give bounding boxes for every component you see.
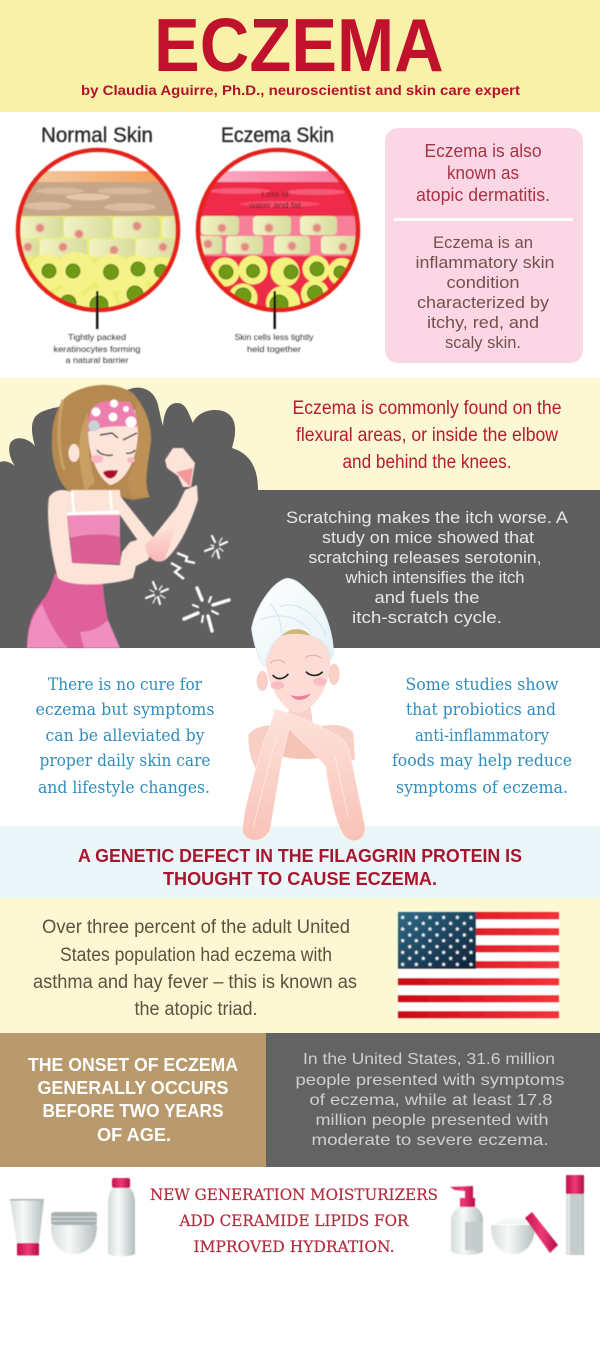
panel: normal skin diagram: a natural barrier	[66, 355, 129, 365]
text: definition: characterized by	[417, 293, 550, 312]
text: definition: inflammatory skin	[416, 253, 554, 272]
panel: atopic triad: asthma and hay fever – this is known as	[33, 972, 357, 993]
panel: atopic triad: the atopic triad.	[134, 999, 258, 1020]
panel: eczema skin diagram	[195, 124, 361, 354]
icon: spark large	[184, 588, 229, 631]
text: definition: itchy, red, and	[427, 313, 539, 332]
panel: atopic dermatitis callout: atopic dermatitis.	[416, 185, 550, 205]
panel: normal skin diagram: Tightly packed	[68, 332, 126, 342]
text: no cure	[36, 675, 214, 798]
text: no cure: can be alleviated by	[46, 726, 205, 746]
panel: atopic dermatitis callout: known as	[447, 163, 519, 183]
panel: atopic dermatitis callout	[385, 128, 583, 363]
panel: US prevalence: people presented with symptoms	[296, 1072, 564, 1089]
panel: onset of eczema: OF AGE.	[97, 1125, 171, 1145]
text: no cure: proper daily skin care	[40, 751, 210, 771]
panel: atopic dermatitis callout: Eczema is also	[424, 141, 542, 161]
text: scratching: Scratching makes the itch worse. A	[286, 509, 568, 527]
text: moisturizers: ADD CERAMIDE LIPIDS FOR	[179, 1211, 409, 1230]
panel: US prevalence: moderate to severe eczema.	[312, 1132, 548, 1149]
text: probiotics: foods may help reduce	[392, 751, 572, 771]
panel: US prevalence	[266, 1033, 600, 1167]
icon: zigzag	[171, 553, 195, 579]
panel: normal skin diagram	[15, 124, 181, 365]
panel: atopic triad: States population had eczema with	[60, 945, 332, 966]
illustration: products right	[450, 1175, 584, 1255]
panel: US prevalence: In the United States, 31.6 million	[303, 1051, 555, 1068]
header band	[0, 0, 600, 112]
text: scratching: and fuels the	[374, 589, 480, 607]
panel: US prevalence: of eczema, while at least 17.8	[310, 1092, 553, 1109]
text: flexural areas: flexural areas, or inside the elbow	[296, 425, 558, 446]
text: definition	[416, 233, 554, 352]
icon: spark	[205, 536, 227, 558]
panel: filaggrin statement: A GENETIC DEFECT IN THE FILAGGRIN PROTEIN IS	[78, 846, 522, 866]
illustration: products left	[10, 1178, 135, 1256]
panel: eczema skin diagram: Loss of	[262, 190, 289, 199]
text: definition: scaly skin.	[445, 333, 521, 352]
text: definition: Eczema is an	[433, 233, 533, 252]
text: probiotics: anti-inflammatory	[415, 726, 549, 746]
text: no cure: eczema but symptoms	[36, 700, 214, 720]
panel: normal skin diagram: Normal Skin	[41, 124, 153, 147]
panel: US prevalence: million people presented with	[316, 1112, 548, 1129]
panel: eczema skin diagram: Skin cells less tightly	[234, 332, 314, 342]
panel: onset of eczema: THE ONSET OF ECZEMA	[28, 1055, 238, 1075]
panel: onset of eczema	[0, 1033, 266, 1167]
panel: atopic triad	[0, 898, 600, 1033]
panel: atopic triad: Over three percent of the adult United	[42, 917, 350, 938]
text: definition: condition	[446, 273, 520, 292]
text: probiotics: symptoms of eczema.	[396, 778, 568, 798]
panel: normal skin diagram: keratinocytes forming	[54, 344, 141, 354]
illustration: woman with towel	[243, 578, 365, 841]
text: scratching	[286, 509, 568, 627]
panel: eczema skin diagram: Eczema Skin	[221, 124, 334, 147]
text: moisturizers	[150, 1185, 438, 1256]
title: ECZEMA	[154, 4, 444, 88]
icon: spark small	[146, 582, 168, 604]
panel: filaggrin statement	[0, 826, 600, 898]
panel: eczema skin diagram: water and fat	[248, 201, 302, 210]
illustration: woman scratching elbow	[27, 385, 229, 648]
text: probiotics: that probiotics and	[406, 700, 556, 720]
icon: US flag	[398, 912, 559, 1019]
text: flexural areas: and behind the knees.	[342, 452, 512, 473]
text: probiotics: Some studies show	[406, 675, 559, 695]
text: scratching: which intensifies the itch	[344, 569, 524, 587]
text: flexural areas: Eczema is commonly found on the	[292, 398, 562, 419]
text: no cure: There is no cure for	[48, 675, 203, 695]
text: scratching: study on mice showed that	[322, 529, 534, 547]
text: no cure: and lifestyle changes.	[38, 778, 210, 798]
text: moisturizers: NEW GENERATION MOISTURIZERS	[150, 1185, 438, 1204]
text: scratching: scratching releases serotonin,	[308, 549, 542, 567]
panel: eczema skin diagram: held together	[247, 344, 301, 354]
section background: flexural areas	[0, 378, 600, 648]
text: flexural areas	[292, 398, 562, 473]
text: scratching: itch-scratch cycle.	[352, 609, 502, 627]
panel: onset of eczema: GENERALLY OCCURS	[38, 1078, 228, 1098]
byline: by Claudia Aguirre, Ph.D., neuroscientist and skin care expert	[81, 82, 520, 98]
text: moisturizers: IMPROVED HYDRATION.	[194, 1237, 394, 1256]
text: probiotics	[392, 675, 572, 798]
panel: onset of eczema: BEFORE TWO YEARS	[42, 1101, 224, 1121]
panel: filaggrin statement: THOUGHT TO CAUSE ECZEMA.	[163, 869, 437, 889]
